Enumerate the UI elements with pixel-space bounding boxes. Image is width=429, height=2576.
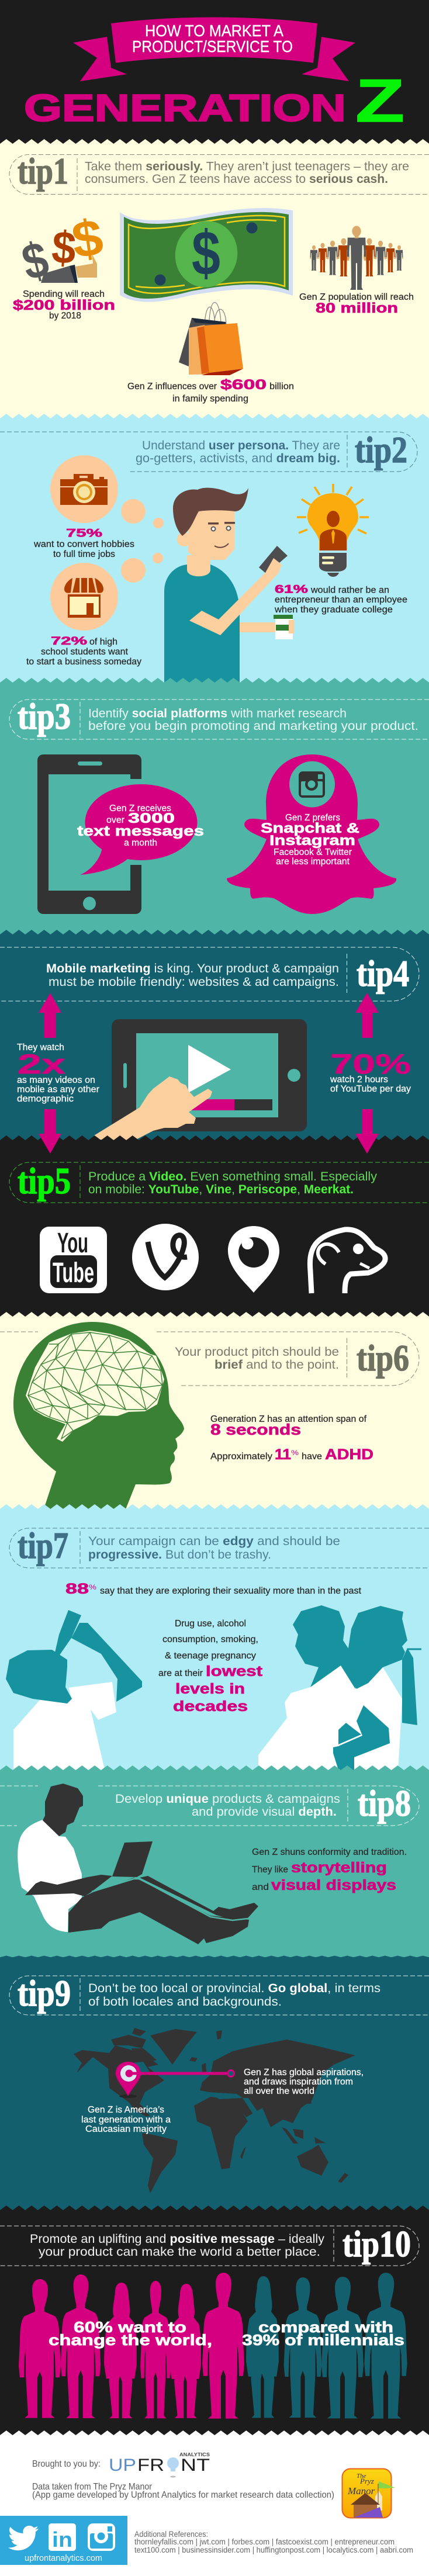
tip text: Identify social platforms with market research [88,707,347,720]
tip text: Develop unique products & campaigns [115,1792,340,1806]
stat: 75 percent: want to convert hobbies [33,539,134,549]
stat: 72 percent: school students want [41,647,129,657]
tip text: Your product pitch should be [175,1345,339,1359]
icon: instagram [88,2523,115,2551]
text: global aspirations [244,2068,364,2096]
section: tip 2 [0,414,429,684]
text: lowest levels: Drug use, alcohol [175,1619,246,1629]
stat: 2x: 2x [18,1048,65,1079]
stat: family spending: Gen Z influences over [127,382,217,392]
text: snapchat and instagram: Snapchat & [261,820,359,836]
section: tip 4 [0,930,429,1141]
icon: snapchat ghost [227,754,396,914]
title line two: PRODUCT/SERVICE TO [132,37,293,56]
tip text: consumers. Gen Z teens have access to serious cash. [85,172,388,186]
stat: 39 percent: compared with [258,2318,393,2336]
website: upfrontanalytics.com [25,2553,102,2563]
tip text: before you begin promoting and marketing your product. [88,719,418,733]
stat: 88 percent: say that they are exploring their sexuality more than in the past [100,1586,362,1596]
character: young man with phone [164,488,294,684]
icon: linkedin: in [52,2527,72,2551]
stat: 72 percent [26,635,141,667]
text: lowest levels: are at their [158,1668,203,1678]
logo: upfront analytics: NT [181,2456,210,2475]
silhouettes: gen z group [19,2273,244,2419]
stat: 72 percent: 72% [51,635,87,648]
section: tip 10 [0,2205,429,2435]
additional references: thornleyfallis.com | jwt.com | forbes.com | fastcoexist.com | entrepreneur.com [134,2537,395,2546]
tip text: Promote an uplifting and positive message – ideally [30,2232,325,2246]
tip text: Understand user persona. They are [142,439,340,452]
stat: 60 percent [49,2318,212,2349]
tip label: tip5 [18,1160,71,1202]
data source: (App game developed by Upfront Analytics for market research data collection) [32,2490,334,2500]
tip text: Produce a Video. Even something small. Especially [88,1170,377,1183]
arrows: left and right pairs [39,993,379,1154]
tip text: of both locales and backgrounds. [88,1995,282,2009]
text: storytelling: and [252,1882,269,1892]
map pin and connector [116,2062,234,2098]
stat: ADHD: 11 [275,1446,291,1463]
thought bubble: store [50,553,163,631]
section: tip 5 [0,1135,429,1317]
tip label: tip8 [358,1782,411,1824]
icon: light bulb [297,484,369,577]
credit label: Brought to you by: [32,2459,101,2469]
text: lowest levels: & teenage pregnancy [165,1651,256,1661]
figure: person drinking [6,1610,142,1772]
tip text [88,707,418,733]
tip text: and provide visual depth. [192,1805,337,1819]
text: Caucasian majority: Caucasian majority [85,2124,167,2134]
text: 3000 messages: a month [124,838,157,848]
icon: group of people [310,226,403,290]
icon: pryz manor app: The [357,2473,366,2480]
logo: upfront analytics: FR [137,2456,164,2475]
icon: vine [132,1224,199,1290]
text: global aspirations: all over the world [244,2086,314,2096]
icon: shopping bags [179,302,243,375]
stat: 88 percent: % [89,1583,96,1591]
stat: 72 percent: to start a business someday [26,657,141,667]
section: tip 6 [0,1312,429,1511]
stat: 2x: demographic [17,1094,74,1104]
tip text: Don’t be too local or provincial. Go global, in terms [88,1982,380,1995]
stat: family spending: billion [269,382,294,392]
stat: 70 percent [330,1048,411,1094]
tip text: on mobile: YouTube, Vine, Periscope, Meerkat. [88,1183,354,1196]
stat: attention span: Generation Z has an attention span of [210,1414,367,1424]
data source [32,2482,334,2500]
text: Caucasian majority: Gen Z is America’s [88,2105,164,2115]
stat: 61 percent: would rather be an [310,586,389,595]
icon: dollar bill: $ [192,217,220,288]
icon: youtube: Tube [53,1258,94,1289]
text: storytelling: visual displays [271,1877,396,1893]
tip text [30,2232,325,2259]
text: Caucasian majority: last generation with a [81,2115,171,2125]
tip text [88,1170,377,1196]
stat: 88 percent: 88 [65,1581,89,1597]
stat: family spending [127,377,294,404]
text: lowest levels: decades [173,1698,248,1715]
stat: 60 percent: change the world, [49,2331,212,2349]
stat: population [299,292,414,316]
silhouettes: millennial group [246,2273,407,2419]
tip label: tip7 [18,1525,68,1566]
stat: ADHD: have [302,1452,322,1462]
logo: upfront analytics [109,2452,210,2478]
illustration: head with brain mesh [13,1322,184,1511]
tip label: tip4 [357,953,409,994]
text: Caucasian majority [81,2105,171,2134]
icon: youtube: You [57,1228,88,1259]
stat: 75 percent [33,527,134,559]
tip text [85,160,409,186]
text: 3000 messages: over [106,815,124,825]
section: tip 8 [0,1765,429,1958]
stat: population: Gen Z population will reach [299,292,414,302]
text: storytelling: Gen Z shuns conformity and tradition. [252,1847,407,1857]
stat: ADHD: Approximately [210,1452,272,1462]
text: lowest levels: consumption, smoking, [162,1635,258,1644]
section: tip 7 [0,1504,429,1772]
stat: 70 percent: watch 2 hours [330,1075,388,1085]
text: 3000 messages: Gen Z receives [109,804,171,813]
text: storytelling: storytelling [291,1860,387,1876]
stat: 2x: They watch [17,1043,64,1052]
stat: family spending: in family spending [172,394,248,404]
tip label: tip10 [342,2223,411,2265]
tip text [46,962,339,989]
icon: dollar signs and hand: $ [68,208,106,269]
stat: ADHD: ADHD [325,1446,373,1463]
tip text: brief and to the point. [214,1358,339,1372]
stat: 2x: as many videos on [17,1075,95,1085]
icon: dollar signs and hand: $ [50,221,78,274]
social panel [0,2516,127,2565]
stat: spending: by 2018 [49,311,81,321]
text: 3000 messages [77,804,204,848]
icon: pryz manor app: Pryz [359,2477,374,2485]
data source: Data taken from The Pryz Manor [32,2482,153,2492]
section: header [0,0,429,146]
stat: 39 percent: 39% of millennials [242,2331,404,2349]
logo: upfront analytics: ANALYTICS [179,2452,210,2457]
stat: 2x: mobile as any other [17,1085,99,1095]
tip text [136,439,340,465]
stat: 75 percent: 75% [66,527,102,540]
text: lowest levels: levels in [175,1681,245,1697]
stat: attention span: 8 seconds [210,1421,301,1438]
text: snapchat and instagram: Instagram [269,833,355,849]
tip text [88,1535,340,1561]
tip label: tip1 [18,150,68,192]
stat: family spending: $600 [220,377,267,393]
title Z: Z [355,67,404,135]
stat: attention span [210,1414,367,1438]
tip text: Mobile marketing is king. Your product & campaign [46,962,339,975]
tip text: go-getters, activists, and dream big. [136,452,340,465]
text: snapchat and instagram: Facebook & Twitter [274,847,352,857]
stat: 39 percent [242,2318,404,2349]
stat: 61 percent: entrepreneur than an employee [275,595,407,605]
icon: pryz manor app [342,2468,395,2518]
stat: 60 percent: 60% want to [74,2318,186,2336]
thought bubble: camera [50,455,164,528]
tip text: your product can make the world a better place. [39,2245,320,2259]
tip label: tip9 [18,1972,71,2014]
text: global aspirations: and draws inspiration from [244,2077,353,2087]
section: footer [0,2430,429,2576]
tip text: must be mobile friendly: websites & ad campaigns. [49,975,339,989]
stat: 61 percent: 61% [275,583,308,596]
text: snapchat and instagram [261,813,359,867]
logo: upfront analytics: UP [109,2456,136,2475]
tip text [175,1345,339,1372]
tip text: Take them seriously. They aren’t just teenagers – they are [85,160,409,173]
stat: population: 80 million [316,300,398,316]
stat: 72 percent: of high [89,637,117,647]
additional references: text100.com | businessinsider.com | huffingtonpost.com | localytics.com | aabri.com [134,2546,413,2554]
icon: tablet with video [94,1019,307,1141]
tip text: progressive. But don’t be trashy. [88,1548,271,1561]
section: tip 3 [0,678,429,935]
icon: smartphone with speech bubble [37,754,198,914]
title line one: HOW TO MARKET A [145,22,283,40]
additional references [134,2530,413,2554]
stat: 75 percent: to full time jobs [53,549,115,559]
tip label: tip3 [18,695,71,737]
stat: ADHD [210,1446,373,1463]
icon: dollar bill [120,208,293,302]
title generation: GENERATION [24,86,346,129]
stat: spending: Spending will reach [23,289,105,299]
stat: ADHD: % [291,1449,299,1457]
stat: 61 percent [274,583,407,615]
text: 3000 messages: text messages [77,823,204,839]
figure: couple [258,1605,421,1772]
icon: pryz manor app: Manor [347,2485,375,2497]
section: tip 1 [0,139,429,418]
text: storytelling: They like [252,1865,288,1875]
tip text: Your campaign can be edgy and should be [88,1535,340,1548]
icon: youtube [40,1227,107,1293]
stat: 61 percent: when they graduate college [274,605,393,615]
text: lowest levels: lowest [206,1663,263,1680]
stat: 88 percent [65,1581,362,1597]
text: snapchat and instagram: are less important [276,857,350,867]
text: lowest levels [158,1619,263,1715]
tip label: tip6 [357,1337,409,1379]
text: 3000 messages: 3000 [128,811,175,826]
icon: meerkat [310,1230,385,1293]
world map [74,2028,355,2193]
section: tip 9 [0,1955,429,2211]
tip text [115,1792,340,1819]
text: global aspirations: Gen Z has global aspirations, [244,2068,364,2078]
icon: twitter [8,2526,39,2550]
stat: spending: $200 billion [13,297,115,313]
text: snapchat and instagram: Gen Z prefers [285,813,340,823]
tip label: tip2 [355,429,407,470]
icon: dollar signs and hand [16,208,106,291]
ribbon banner [73,18,355,81]
additional references: Additional References: [134,2530,208,2539]
tip text [88,1982,380,2009]
icon: periscope [228,1226,279,1293]
stat: 70 percent: of YouTube per day [330,1084,411,1094]
stat: spending [13,289,115,321]
icon: linkedin [49,2523,76,2551]
figure: man with laptop [18,1784,258,1944]
icon: dollar signs and hand: $ [16,231,54,291]
stat: 70 percent: 70% [330,1048,411,1079]
text: storytelling [252,1847,407,1893]
stat: 2x [17,1043,99,1104]
